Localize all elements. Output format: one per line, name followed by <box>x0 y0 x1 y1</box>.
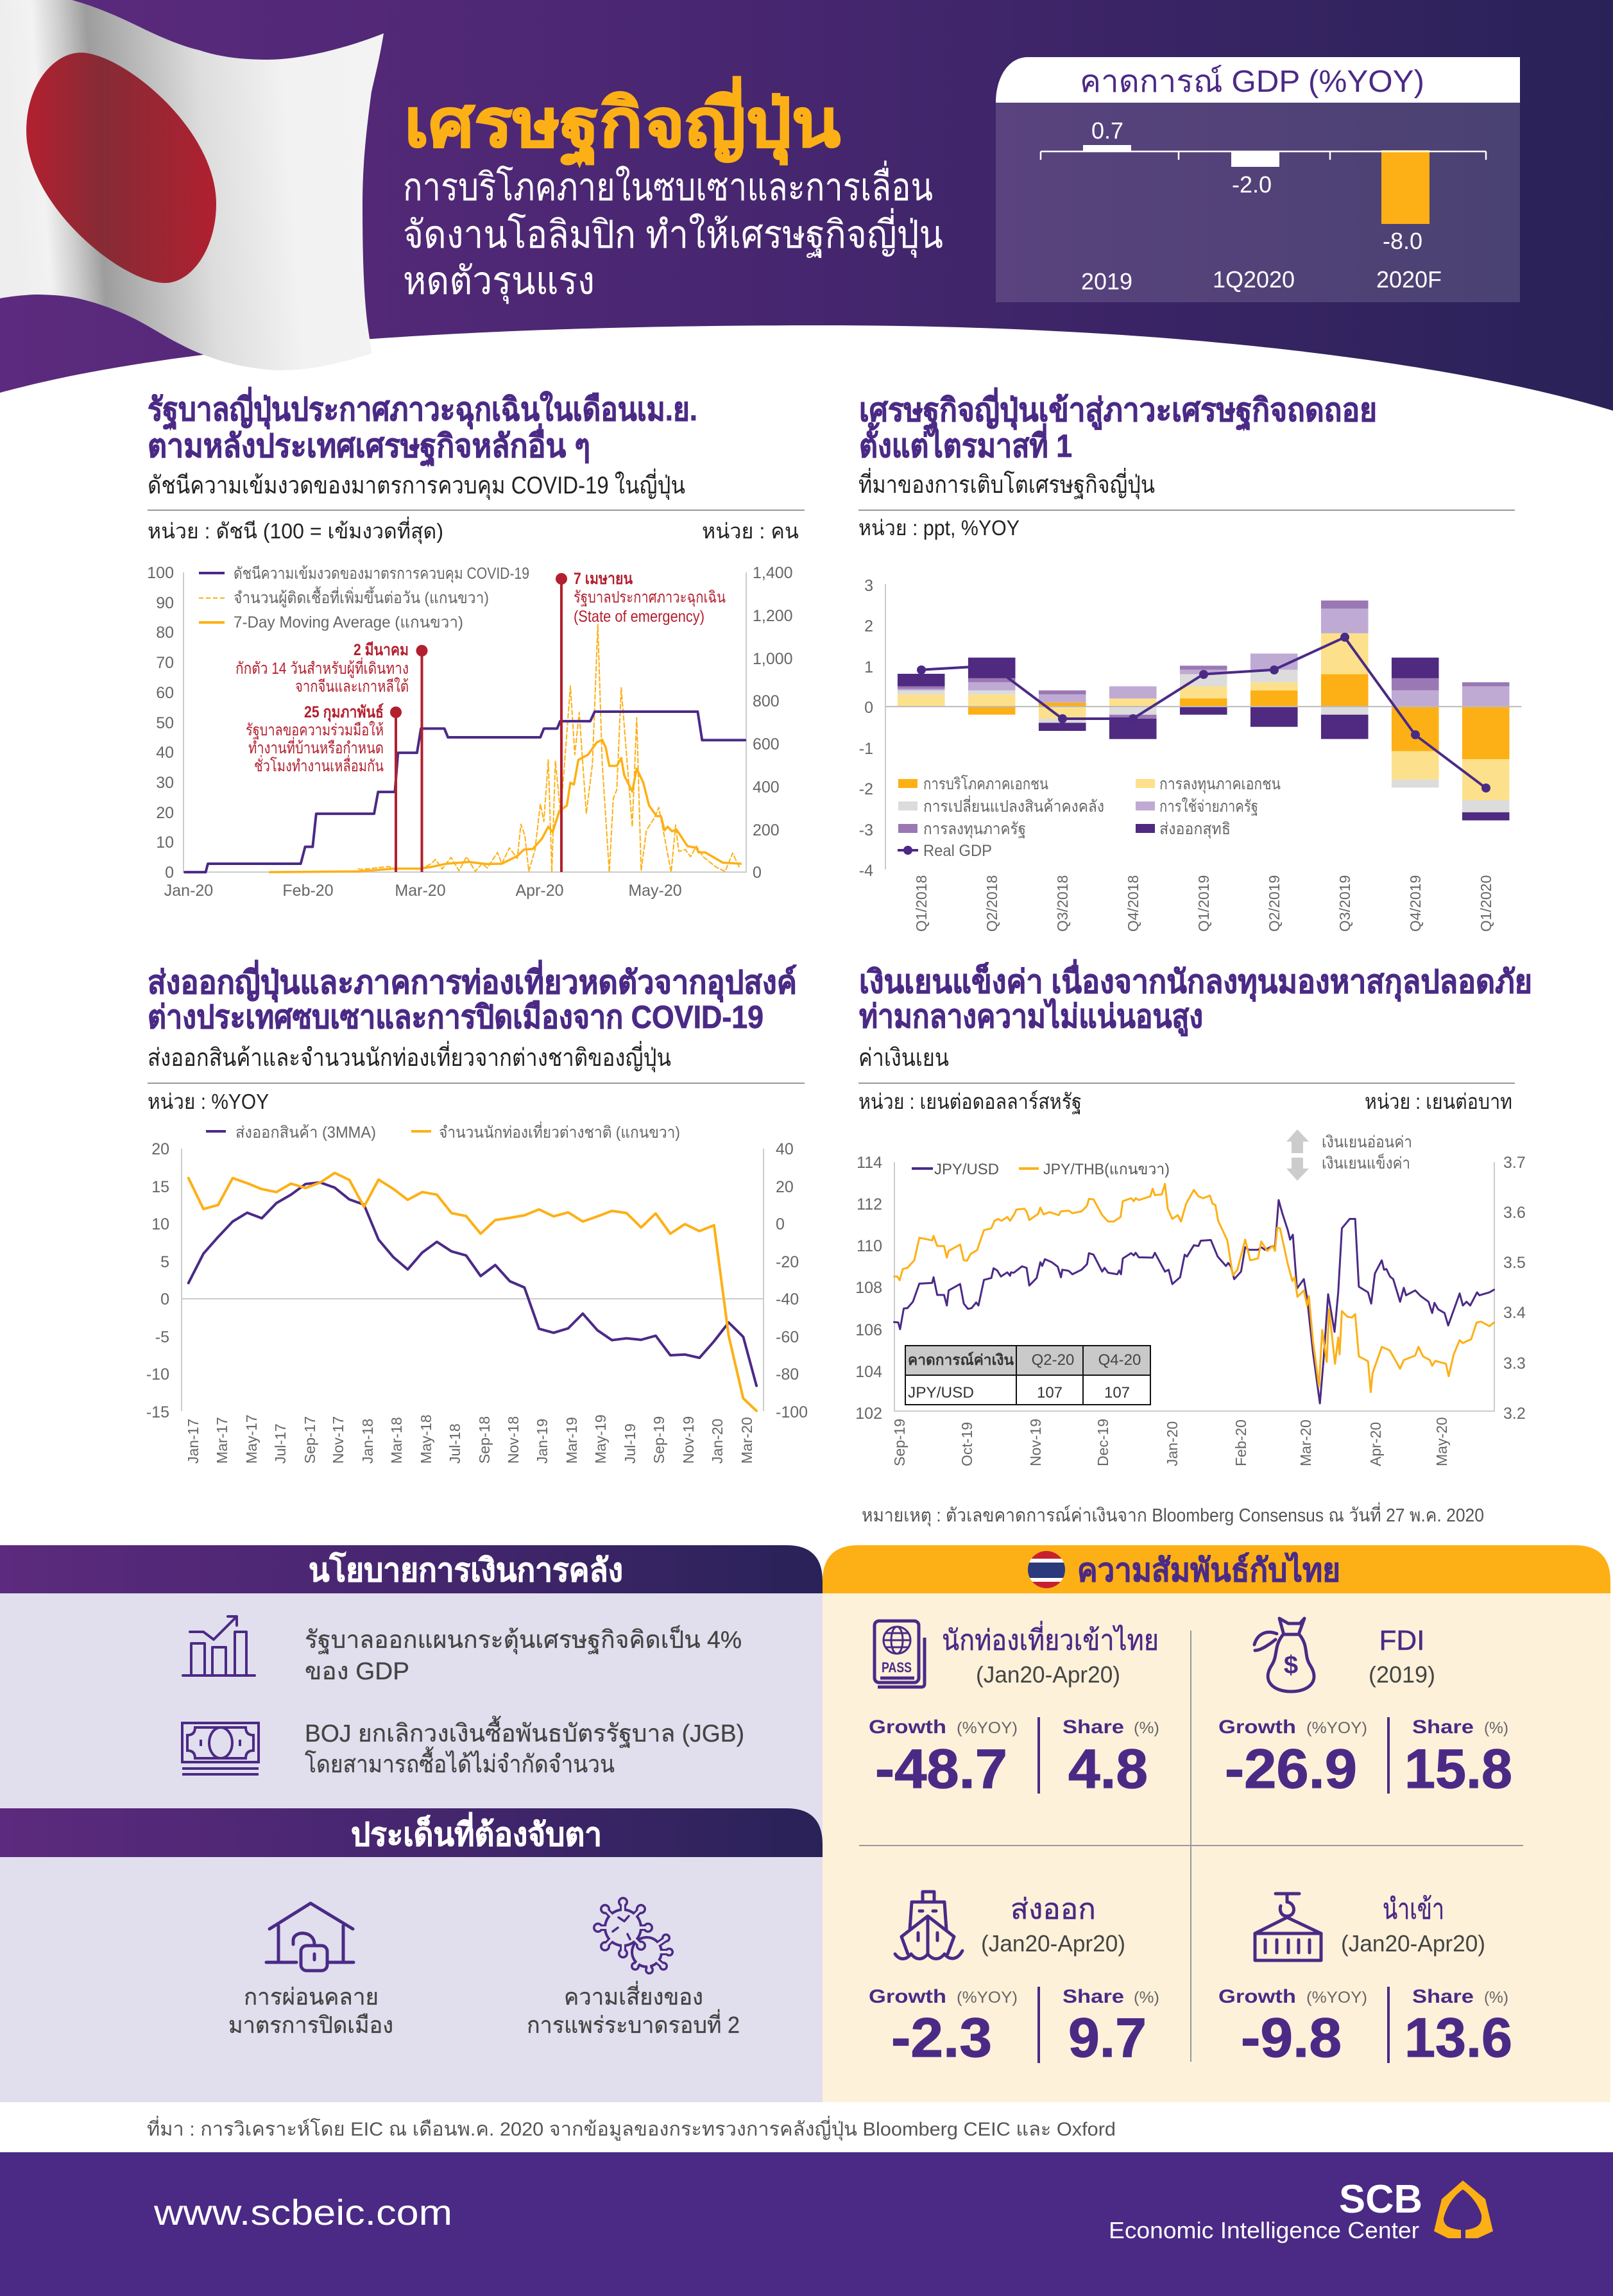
line chart: yen: 3.3 <box>1503 1355 1526 1373</box>
units: หน่วย : เยนต่อดอลลาร์สหรัฐ <box>858 1090 1082 1115</box>
callout: 2 March: กักตัว 14 วันสำหรับผู้ที่เดินทาง <box>235 657 409 678</box>
Real GDP markers <box>917 633 1490 792</box>
line chart: yen: Nov-19 <box>1027 1419 1044 1466</box>
icon: passport <box>875 1621 925 1687</box>
stat: imports: -9.8 <box>1241 2007 1342 2069</box>
icon: house with unlock <box>266 1903 354 1971</box>
icon: money bag: $ <box>1284 1651 1298 1679</box>
text: BOJ: โดยสามารถซื้อได้ไม่จำกัดจำนวน <box>305 1746 615 1778</box>
units <box>148 517 799 544</box>
stat: imports: (Jan20-Apr20) <box>1341 1930 1485 1957</box>
stat: exports: Growth <box>869 1986 946 2007</box>
line chart: yen: 3.7 <box>1503 1154 1526 1172</box>
forecast table <box>905 1346 1150 1405</box>
line chart: stringency and new cases: 20 <box>156 804 174 822</box>
Q3/2018 <box>1039 690 1086 731</box>
text: stimulus <box>305 1625 742 1685</box>
forecast table: Q2-20 <box>1032 1351 1074 1369</box>
line chart: exports and tourists: 10 <box>151 1215 169 1233</box>
stat: FDI: -26.9 <box>1225 1738 1357 1800</box>
line chart: yen: Apr-20 <box>1367 1422 1384 1466</box>
line chart: exports and tourists: -60 <box>776 1328 799 1346</box>
arrows: yen direction: เงินเยนอ่อนค่า <box>1322 1133 1412 1151</box>
line chart: exports and tourists: Mar-17 <box>214 1417 230 1464</box>
heading: รัฐบาลญี่ปุ่นประกาศภาวะฉุกเฉินในเดือนเม.ย. <box>148 387 697 430</box>
legend: การบริโภคภาคเอกชน <box>923 775 1048 793</box>
line chart: stringency and new cases: 1,400 <box>753 564 793 582</box>
text: second wave: ความเสี่ยงของ <box>564 1981 703 2010</box>
subtitle: ที่มาของการเติบโตเศรษฐกิจญี่ปุ่น <box>858 468 1155 499</box>
line chart: exports and tourists <box>146 1140 808 1464</box>
line chart: exports and tourists: -100 <box>776 1403 808 1421</box>
text: BOJ <box>305 1715 744 1778</box>
stat: FDI: 15.8 <box>1404 1738 1512 1800</box>
units: หน่วย : เยนต่อบาท <box>1365 1090 1512 1113</box>
line chart: stringency and new cases: 800 <box>753 692 780 710</box>
line chart: yen: Oct-19 <box>959 1422 975 1466</box>
stat: FDI: (2019) <box>1369 1661 1435 1688</box>
text: BOJ: BOJ ยกเลิกวงเงินซื้อพันธบัตรรัฐบาล (JGB) <box>305 1715 744 1748</box>
stacked bar chart: 2 <box>864 617 873 635</box>
units <box>858 1090 1512 1115</box>
line chart: exports and tourists: Jan-20 <box>709 1419 726 1464</box>
bar chart: GDP: 2019 <box>1081 268 1132 295</box>
heading: watch list: ประเด็นที่ต้องจับตา <box>351 1812 602 1853</box>
stacked bar chart: Q1/2020 <box>1478 875 1494 932</box>
header subtitle: หดตัวรุนแรง <box>403 259 595 304</box>
callout: 25 February: ทำงานที่บ้านหรือกำหนด <box>248 737 384 757</box>
Q4/2019 <box>1392 658 1439 787</box>
line chart: stringency and new cases: 0 <box>165 864 174 882</box>
heading: ตั้งแต่ไตรมาสที่ 1 <box>859 422 1072 464</box>
stat: exports: ส่งออก <box>1011 1894 1096 1925</box>
line chart: yen: 106 <box>855 1321 882 1339</box>
line chart: exports and tourists: 0 <box>160 1290 169 1308</box>
line chart: stringency and new cases: 400 <box>753 778 780 796</box>
subtitle: ค่าเงินเยน <box>858 1045 949 1072</box>
heading <box>859 959 1532 1036</box>
line chart: yen <box>855 1154 1526 1466</box>
heading: watch list <box>0 1808 823 1857</box>
logo: SCB: SCB <box>1339 2177 1422 2222</box>
line chart: stringency and new cases: Mar-20 <box>395 882 446 900</box>
bar chart: GDP: -8.0 <box>1383 228 1422 254</box>
line chart: exports and tourists: Sep-19 <box>651 1416 667 1464</box>
stacked bar chart: -2 <box>859 780 873 798</box>
stat: exports: (%YOY) <box>957 1989 1018 2007</box>
line chart: stringency and new cases: Apr-20 <box>515 882 564 900</box>
subtitle: ส่งออกสินค้าและจำนวนนักท่องเที่ยวจากต่างชาติของญี่ปุ่น <box>148 1041 671 1072</box>
title: เศรษฐกิจญี่ปุ่น <box>404 76 841 167</box>
panel: COVID stringency <box>147 387 805 900</box>
stat: FDI: (%) <box>1484 1719 1508 1737</box>
line chart: exports and tourists: -20 <box>776 1253 799 1271</box>
header subtitle: การบริโภคภายในซบเซาและการเลื่อน <box>403 160 933 209</box>
legend: ดัชนีความเข้มงวดของมาตรการควบคุม COVID-19 <box>234 565 529 583</box>
stat: imports: Share <box>1412 1986 1474 2007</box>
panel: GDP forecast <box>996 57 1520 302</box>
stacked bar chart: Q3/2018 <box>1054 875 1071 932</box>
line chart: stringency and new cases: 1,000 <box>753 650 793 668</box>
stat: exports: (%) <box>1134 1989 1159 2007</box>
line chart: stringency and new cases: 60 <box>156 684 174 702</box>
line chart: yen: 114 <box>857 1154 882 1172</box>
stat: imports <box>1218 1894 1512 2069</box>
text: lockdown easing <box>228 1983 393 2038</box>
line chart: yen: Sep-19 <box>891 1419 908 1466</box>
panel: GDP forecast: คาดการณ์ GDP (%YOY) <box>1080 65 1424 99</box>
stat: tourists: นักท่องเที่ยวเข้าไทย <box>942 1620 1159 1656</box>
stat: tourists: Share <box>1063 1717 1124 1738</box>
stat: FDI: FDI <box>1379 1625 1424 1656</box>
forecast table: JPY/USD <box>908 1384 974 1401</box>
header subtitle: จัดงานโอลิมปิก ทำให้เศรษฐกิจญี่ปุ่น <box>403 208 943 258</box>
stat: tourists: (%YOY) <box>957 1719 1018 1737</box>
line chart: stringency and new cases: Jan-20 <box>164 882 213 900</box>
line chart: stringency and new cases: 70 <box>156 654 174 672</box>
line chart: exports and tourists: Mar-20 <box>738 1417 755 1464</box>
stat: exports <box>869 1892 1159 2069</box>
line chart: yen: 3.6 <box>1503 1204 1526 1222</box>
bar chart: GDP: 0.7 <box>1091 117 1123 144</box>
event markers <box>390 573 567 872</box>
Q4/2018 <box>1109 687 1157 739</box>
legend <box>898 775 1281 860</box>
arrows: yen direction: เงินเยนแข็งค่า <box>1322 1153 1410 1172</box>
line chart: exports and tourists: Mar-18 <box>388 1417 405 1464</box>
forecast table: คาดการณ์ค่าเงิน <box>908 1351 1014 1368</box>
line chart: yen: 102 <box>855 1405 882 1423</box>
line chart: yen: 112 <box>857 1195 882 1213</box>
line chart: exports and tourists: Jul-18 <box>447 1423 463 1464</box>
forecast table: 107 <box>1104 1384 1130 1401</box>
stat: exports: (Jan20-Apr20) <box>981 1930 1125 1957</box>
callout: 7 April <box>574 570 726 626</box>
line chart: exports and tourists: Nov-17 <box>330 1416 346 1464</box>
stat: imports: (%YOY) <box>1306 1989 1367 2007</box>
stacked bar chart: Q2/2018 <box>984 875 1000 932</box>
icon: money bag <box>1254 1618 1314 1692</box>
line chart: stringency and new cases: 0 <box>753 864 762 882</box>
line chart: exports and tourists: Sep-17 <box>302 1416 318 1464</box>
heading: policy <box>0 1545 823 1593</box>
legend: การลงทุนภาครัฐ <box>923 820 1026 839</box>
callout: 25 February: 25 กุมภาพันธ์ <box>304 703 384 723</box>
stat: imports: 13.6 <box>1404 2007 1512 2069</box>
line chart: yen: Mar-20 <box>1297 1419 1314 1466</box>
panel: GDP contribution <box>858 388 1521 932</box>
stat: FDI: Share <box>1412 1717 1474 1738</box>
legend: JPY/USD <box>934 1161 999 1178</box>
line chart: stringency and new cases: 100 <box>147 564 174 582</box>
callout: 25 February <box>246 703 384 775</box>
legend: ส่งออกสุทธิ <box>1159 820 1231 839</box>
stat: FDI: (%YOY) <box>1306 1719 1367 1737</box>
legend: การลงทุนภาคเอกชน <box>1159 775 1281 794</box>
source note: ที่มา : การวิเคราะห์โดย EIC ณ เดือนพ.ค. 2020 จากข้อมูลของกระทรวงการคลังญี่ปุ่น Bloomberg CEIC และ Oxford <box>147 2116 1116 2141</box>
line chart: stringency and new cases: May-20 <box>628 882 682 900</box>
line chart: exports and tourists: -10 <box>146 1366 169 1384</box>
line chart: stringency and new cases: 1,200 <box>753 607 793 625</box>
callout: 25 February: ชั่วโมงทำงานเหลื่อมกัน <box>254 755 384 775</box>
line chart: yen: May-20 <box>1433 1417 1450 1466</box>
callout: 7 April: (State of emergency) <box>574 608 704 626</box>
legend: การใช้จ่ายภาครัฐ <box>1159 797 1258 816</box>
legend: การเปลี่ยนแปลงสินค้าคงคลัง <box>923 795 1104 816</box>
stacked bar chart: Q1/2018 <box>913 875 930 932</box>
line chart: exports and tourists: Mar-19 <box>563 1417 580 1464</box>
stacked bar chart: -3 <box>859 821 873 839</box>
callout: 7 April: 7 เมษายน <box>574 570 633 588</box>
line chart: exports and tourists: 15 <box>151 1178 169 1196</box>
line chart: exports and tourists: May-19 <box>592 1414 609 1464</box>
bar chart: GDP: 2020F <box>1376 266 1442 293</box>
heading <box>823 1545 1610 1593</box>
forecast table: 107 <box>1037 1384 1063 1401</box>
line chart: exports and tourists: Nov-19 <box>680 1416 697 1464</box>
logo: SCB: Economic Intelligence Center <box>1109 2217 1419 2243</box>
icon: growth chart <box>183 1616 255 1675</box>
stacked bar chart: -4 <box>859 862 873 880</box>
stat: tourists: Growth <box>869 1717 946 1738</box>
arrows: yen direction <box>1286 1129 1412 1181</box>
line chart: stringency and new cases: Feb-20 <box>282 882 334 900</box>
legend: JPY/THB(แกนขวา) <box>1043 1161 1170 1178</box>
stacked bar chart <box>859 577 1521 932</box>
icon: banknote <box>182 1723 259 1774</box>
stacked bar chart: Q3/2019 <box>1336 875 1353 932</box>
bar chart: GDP: 1Q2020 <box>1213 266 1295 293</box>
panel: relation with Thailand <box>823 1545 1610 2102</box>
line chart: stringency and new cases: 10 <box>156 834 174 852</box>
stacked bar chart: Q2/2019 <box>1266 875 1283 932</box>
text: stimulus: ของ GDP <box>305 1658 409 1685</box>
stat: exports: -2.3 <box>891 2007 992 2069</box>
website: www.scbeic.com <box>153 2192 452 2232</box>
callout: 7 April: รัฐบาลประกาศภาวะฉุกเฉิน <box>574 588 726 607</box>
panel: fiscal and monetary policy <box>0 1545 823 2102</box>
stacked bar chart: 0 <box>864 699 873 717</box>
line chart: exports and tourists: -40 <box>776 1290 799 1308</box>
header subtitle <box>403 160 943 304</box>
line chart: stringency and new cases: 90 <box>156 594 174 612</box>
line chart: exports and tourists: -80 <box>776 1366 799 1384</box>
text: second wave <box>527 1981 740 2038</box>
line chart: exports and tourists: Jul-17 <box>272 1423 289 1464</box>
line chart: yen: 108 <box>855 1279 882 1297</box>
line chart: exports and tourists: 20 <box>776 1178 794 1196</box>
units: หน่วย : ดัชนี (100 = เข้มงวดที่สุด) <box>148 517 443 544</box>
callout: 2 March: จากจีนและเกาหลีใต้ <box>295 677 409 696</box>
stat: FDI <box>1218 1618 1512 1800</box>
line chart: exports and tourists: Nov-18 <box>505 1416 522 1464</box>
callout: 2 March <box>235 641 409 696</box>
heading <box>148 387 697 467</box>
legend: 7-Day Moving Average (แกนขวา) <box>234 613 463 631</box>
stat: tourists: (Jan20-Apr20) <box>976 1661 1120 1688</box>
icon: passport: PASS <box>882 1659 912 1675</box>
heading: เงินเยนแข็งค่า เนื่องจากนักลงทุนมองหาสกุลปลอดภัย <box>859 959 1532 1002</box>
line chart: stringency and new cases: 200 <box>753 821 780 839</box>
heading <box>859 388 1377 464</box>
legend <box>912 1161 1170 1178</box>
header background <box>0 0 1613 449</box>
Q1/2018 <box>898 674 945 707</box>
stacked bar chart: 1 <box>864 658 873 676</box>
heading <box>148 960 797 1035</box>
icon: container <box>1255 1894 1321 1960</box>
heading: ความสัมพันธ์กับไทย <box>1077 1552 1340 1588</box>
stat: tourists: -48.7 <box>875 1738 1007 1800</box>
icon: virus <box>593 1897 674 1975</box>
text: lockdown easing: มาตรการปิดเมือง <box>228 2012 393 2038</box>
logo: SCB <box>1109 2177 1493 2243</box>
line chart: exports and tourists: May-18 <box>418 1414 434 1464</box>
callout: 25 February: รัฐบาลขอความร่วมมือให้ <box>246 721 384 739</box>
line chart: yen: Dec-19 <box>1095 1419 1111 1466</box>
line chart: exports and tourists: Jul-19 <box>622 1423 638 1464</box>
line chart: exports and tourists: Jan-18 <box>359 1419 376 1464</box>
line chart: exports and tourists: 20 <box>151 1140 169 1158</box>
stacked bar chart: Q4/2018 <box>1125 875 1141 932</box>
legend: ส่งออกสินค้า (3MMA) <box>235 1124 376 1142</box>
text: stimulus: รัฐบาลออกแผนกระตุ้นเศรษฐกิจคิดเป็น 4% <box>305 1625 742 1654</box>
line chart: exports and tourists: Sep-18 <box>476 1416 493 1464</box>
icon: ship <box>895 1892 962 1958</box>
text: lockdown easing: การผ่อนคลาย <box>244 1983 379 2010</box>
legend: จำนวนผู้ติดเชื้อที่เพิ่มขึ้นต่อวัน (แกนขวา) <box>234 586 489 608</box>
callout: 2 March: 2 มีนาคม <box>354 641 409 659</box>
line chart: yen: 104 <box>855 1363 882 1381</box>
line chart: exports and tourists: May-17 <box>243 1414 260 1464</box>
stacked bar chart: -1 <box>859 740 873 758</box>
heading: policy: นโยบายการเงินการคลัง <box>309 1551 623 1588</box>
stat: tourists <box>869 1620 1159 1800</box>
heading: ต่างประเทศซบเซาและการปิดเมืองจาก COVID-19 <box>148 999 764 1035</box>
heading: ท่ามกลางความไม่แน่นอนสูง <box>859 998 1203 1036</box>
stat: tourists: (%) <box>1134 1719 1159 1737</box>
footer <box>0 2152 1613 2296</box>
line chart: yen: Feb-20 <box>1233 1419 1249 1466</box>
line chart: yen: 110 <box>857 1237 882 1255</box>
stacked bar chart: 3 <box>864 577 873 595</box>
bar chart: GDP: -2.0 <box>1232 171 1272 198</box>
bar chart: GDP <box>1041 117 1486 295</box>
stat: imports: Growth <box>1218 1986 1296 2007</box>
stat: imports: นำเข้า <box>1383 1894 1444 1925</box>
line chart: stringency and new cases: 50 <box>156 714 174 732</box>
line chart: stringency and new cases: 600 <box>753 735 780 753</box>
stat: tourists: 4.8 <box>1068 1738 1148 1800</box>
stat: exports: Share <box>1063 1986 1124 2007</box>
subtitle: ดัชนีความเข้มงวดของมาตรการควบคุม COVID-19 ในญี่ปุ่น <box>148 468 685 500</box>
icon: Japanese flag <box>0 0 384 370</box>
Q1/2019 <box>1180 665 1227 715</box>
line chart: exports and tourists: -5 <box>155 1328 169 1346</box>
icon: Thai flag <box>1027 1551 1066 1589</box>
line chart: stringency and new cases: 40 <box>156 744 174 762</box>
stat: imports: (%) <box>1484 1989 1508 2007</box>
Q1/2020 <box>1462 682 1510 820</box>
panel: yen <box>855 959 1532 1527</box>
line chart: stringency and new cases: 80 <box>156 624 174 642</box>
line chart: yen: Jan-20 <box>1164 1421 1181 1466</box>
text: second wave: การแพร่ระบาดรอบที่ 2 <box>527 2009 740 2038</box>
line chart: yen: 3.4 <box>1503 1304 1526 1322</box>
units: หน่วย : ppt, %YOY <box>858 516 1020 540</box>
legend <box>206 1121 680 1142</box>
note: หมายเหตุ : ตัวเลขคาดการณ์ค่าเงินจาก Bloomberg Consensus ณ วันที่ 27 พ.ค. 2020 <box>862 1502 1484 1527</box>
units: หน่วย : คน <box>702 519 799 543</box>
line chart: exports and tourists: 5 <box>160 1253 169 1271</box>
line chart: exports and tourists: -15 <box>146 1403 169 1421</box>
heading: เศรษฐกิจญี่ปุ่นเข้าสู่ภาวะเศรษฐกิจถดถอย <box>859 388 1377 431</box>
heading: ตามหลังประเทศเศรษฐกิจหลักอื่น ๆ <box>148 424 590 467</box>
line chart: exports and tourists: 0 <box>776 1215 785 1233</box>
line chart: stringency and new cases <box>147 564 793 900</box>
stat: exports: 9.7 <box>1068 2007 1147 2069</box>
stat: FDI: Growth <box>1218 1717 1296 1738</box>
legend: Real GDP <box>923 842 992 860</box>
line chart: exports and tourists: Jan-19 <box>534 1419 550 1464</box>
line chart: exports and tourists: 40 <box>776 1140 794 1158</box>
units: หน่วย : %YOY <box>148 1090 269 1113</box>
stacked bar chart: Q4/2019 <box>1407 875 1424 932</box>
line chart: stringency and new cases: 30 <box>156 774 174 792</box>
stacked bar chart: Q1/2019 <box>1195 875 1212 932</box>
legend <box>199 565 529 631</box>
forecast table: Q4-20 <box>1098 1351 1141 1369</box>
panel: exports and tourism <box>146 960 808 1464</box>
line chart: exports and tourists: Jan-17 <box>185 1419 201 1464</box>
line chart: yen: 3.5 <box>1503 1254 1526 1272</box>
heading: ส่งออกญี่ปุ่นและภาคการท่องเที่ยวหดตัวจากอุปสงค์ <box>148 960 797 1002</box>
legend: จำนวนนักท่องเที่ยวต่างชาติ (แกนขวา) <box>439 1121 680 1142</box>
Q2/2018 <box>968 678 1016 715</box>
Q3/2019 <box>1321 601 1369 739</box>
line chart: yen: 3.2 <box>1503 1405 1526 1423</box>
Q2/2019 <box>1250 653 1298 727</box>
